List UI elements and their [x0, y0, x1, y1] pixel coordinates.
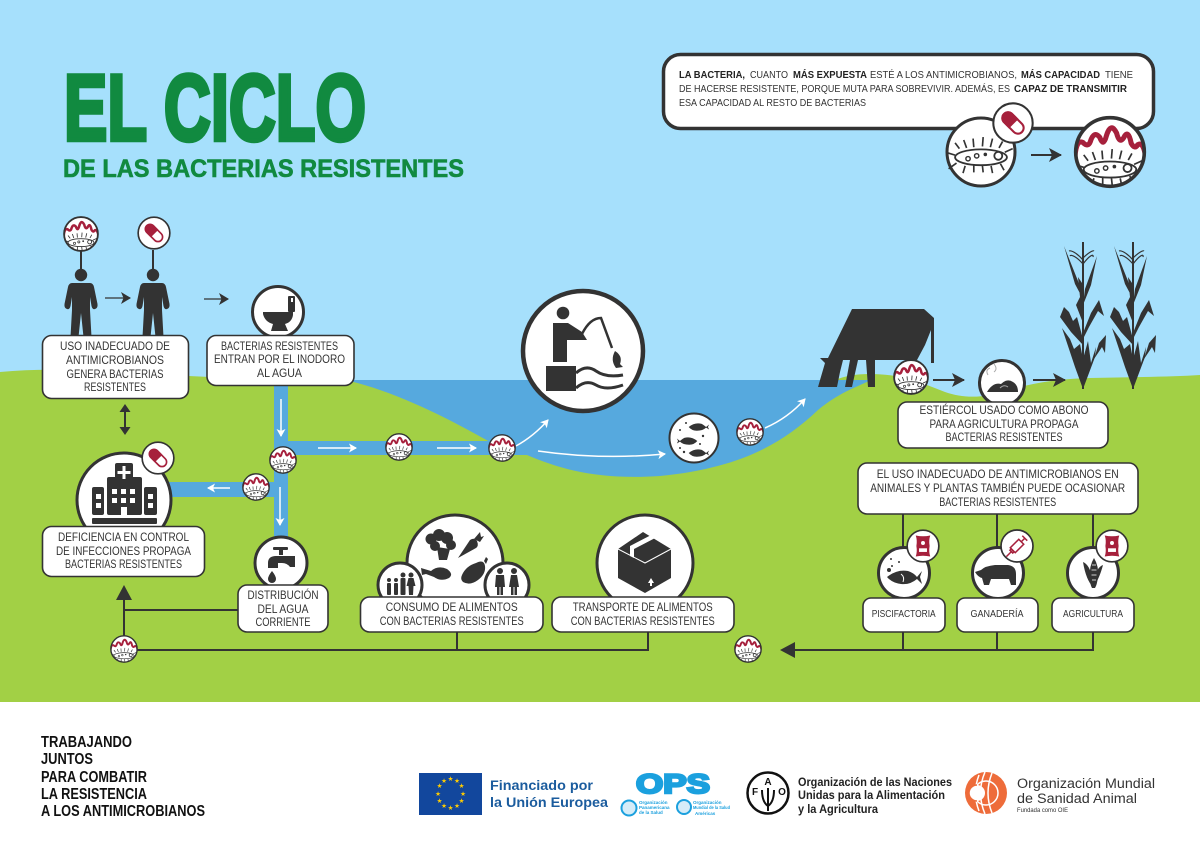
logo: FAO: Organización de las Naciones — [798, 775, 952, 789]
text box: explanation: MÁS CAPACIDAD — [1021, 68, 1100, 81]
logo: OPS: Mundial de la Salud — [693, 805, 730, 810]
icon: corn plant — [1060, 242, 1106, 389]
slogan: PARA COMBATIR — [41, 769, 147, 786]
logo: OPS: OPS — [636, 769, 710, 799]
text box: explanation: ESA CAPACIDAD AL RESTO DE BACTERIAS — [679, 97, 866, 109]
icon: syringe — [1001, 530, 1033, 562]
footer background — [0, 702, 1200, 849]
logo: European Union: ★ — [441, 777, 447, 785]
text box: explanation: LA BACTERIA, — [679, 69, 745, 81]
icon: capsule — [993, 103, 1033, 143]
logo: European Union: ★ — [459, 782, 465, 790]
icon: feed sack — [907, 530, 939, 562]
slogan: TRABAJANDO — [41, 734, 132, 751]
text box: water distribution: CORRIENTE — [256, 615, 310, 629]
icon: faucet — [255, 537, 307, 589]
text box: water distribution: DEL AGUA — [258, 602, 308, 616]
text box: water distribution — [238, 585, 328, 632]
label: fish farm: PISCIFACTORIA — [872, 609, 936, 620]
icon: resistant bacteria — [1075, 118, 1145, 186]
text box: inappropriate use: RESISTENTES — [84, 380, 146, 394]
icon: pig — [972, 548, 1024, 598]
logo: WOAH: Fundada como OIE — [1017, 807, 1069, 814]
text box: hospital: DE INFECCIONES PROPAGA — [56, 544, 191, 558]
slogan: LA RESISTENCIA — [41, 786, 147, 803]
text box: toilet: AL AGUA — [257, 366, 302, 380]
arrow: bacteria to resistant — [1031, 154, 1061, 156]
arrow: double headed — [120, 404, 130, 435]
text box: transport: CON BACTERIAS RESISTENTES — [571, 614, 715, 628]
text box: transport — [552, 597, 734, 632]
label: livestock — [957, 598, 1038, 632]
step: person with resistant bacteria — [64, 217, 98, 337]
icon: manure — [980, 360, 1024, 406]
label: livestock: GANADERÍA — [970, 607, 1024, 620]
arrow: to manure — [933, 379, 964, 381]
text box: consumption: CONSUMO DE ALIMENTOS — [386, 600, 518, 614]
text box: water distribution: DISTRIBUCIÓN — [248, 587, 318, 602]
text box: explanation: MÁS EXPUESTA — [793, 68, 867, 81]
bacteria markers along the flow — [111, 360, 928, 662]
text box: manure — [898, 402, 1108, 448]
text box: explanation — [664, 54, 1154, 128]
logo: European Union: ★ — [460, 790, 466, 798]
arrow: person to toilet — [204, 298, 228, 300]
slogan — [41, 734, 205, 820]
text box: explanation: ESTÉ A LOS ANTIMICROBIANOS, — [870, 68, 1017, 81]
logo: OPS: de la Salud — [639, 810, 663, 815]
arrow: manure to crops — [1033, 379, 1065, 381]
logo: FAO: A — [764, 777, 772, 788]
logo: European Union: ★ — [454, 802, 460, 810]
text box: explanation: DE HACERSE RESISTENTE, PORQUE MUTA PARA SOBREVIVIR. ADEMÁS, ES — [679, 82, 1010, 95]
logo: European Union: Financiado por — [490, 778, 594, 793]
slogan: JUNTOS — [41, 751, 93, 768]
logo: OPS — [622, 769, 730, 816]
logo: European Union: la Unión Europea — [490, 795, 609, 810]
label: fish farm — [863, 598, 945, 632]
text box: manure: PARA AGRICULTURA PROPAGA — [930, 417, 1078, 431]
text box: animals and plants: BACTERIAS RESISTENTES — [939, 495, 1056, 509]
text box: hospital: DEFICIENCIA EN CONTROL — [58, 530, 189, 544]
panel: bacteria explanation — [664, 54, 1154, 186]
logo: WOAH — [965, 772, 1155, 814]
icon: fishing — [523, 291, 643, 411]
text box: explanation: CAPAZ DE TRANSMITIR — [1014, 83, 1127, 95]
text box: toilet — [207, 336, 354, 386]
text box: transport: TRANSPORTE DE ALIMENTOS — [573, 600, 713, 614]
logo: WOAH: Organización Mundial — [1017, 776, 1155, 791]
text box: manure: BACTERIAS RESISTENTES — [946, 430, 1062, 444]
white water flow arrows — [208, 399, 805, 525]
text box: inappropriate use: GENERA BACTERIAS — [66, 367, 164, 381]
logo: OPS: Panamericana — [639, 805, 670, 810]
logo: FAO — [748, 772, 952, 816]
label: agriculture — [1052, 598, 1134, 632]
text box: consumption — [360, 597, 543, 632]
icon: food — [407, 515, 503, 611]
icon: fish farm — [878, 548, 930, 598]
icon: corn plant — [1110, 242, 1156, 389]
pipes: water channels — [165, 385, 500, 545]
flow lines bottom — [116, 514, 1093, 658]
logo: OPS: Américas — [695, 811, 716, 816]
icon: capsule hospital — [142, 442, 174, 474]
logo: WOAH: de Sanidad Animal — [1017, 791, 1137, 806]
logo: European Union — [419, 773, 609, 815]
title: DE LAS BACTERIAS RESISTENTES — [63, 155, 464, 183]
icon: cow — [818, 309, 934, 387]
logo: FAO: F — [752, 787, 758, 798]
text box: inappropriate use: ANTIMICROBIANOS — [66, 353, 164, 367]
icon: family — [378, 563, 422, 607]
icon: fish in water — [670, 414, 718, 462]
icon: bacteria before exposure — [947, 118, 1015, 186]
icon: hospital — [77, 453, 171, 547]
label: agriculture: AGRICULTURA — [1063, 609, 1123, 620]
text box: toilet: BACTERIAS RESISTENTES — [221, 339, 338, 353]
logo: European Union: ★ — [448, 775, 454, 783]
text box: animals and plants — [858, 463, 1138, 514]
logo: European Union: ★ — [435, 790, 441, 798]
logo: European Union: ★ — [437, 797, 443, 805]
text box: animals and plants: ANIMALES Y PLANTAS TAMBIÉN PUEDE OCASIONAR — [870, 480, 1125, 495]
logo: FAO: Unidas para la Alimentación — [798, 788, 945, 802]
logo: FAO: O — [778, 787, 786, 798]
slogan: A LOS ANTIMICROBIANOS — [41, 803, 205, 820]
text box: animals and plants: EL USO INADECUADO DE ANTIMICROBIANOS EN — [877, 467, 1119, 481]
arrow: between people — [105, 297, 130, 299]
icon: adults — [485, 563, 529, 607]
logo: European Union: ★ — [448, 804, 454, 812]
text box: explanation: TIENE — [1105, 69, 1133, 81]
step: person with antimicrobial — [136, 217, 170, 337]
text box: hospital: BACTERIAS RESISTENTES — [65, 557, 182, 571]
text box: inappropriate use — [42, 336, 188, 398]
text box: hospital — [42, 526, 204, 576]
text box: toilet: ENTRAN POR EL INODORO — [214, 352, 345, 366]
text box: consumption: CON BACTERIAS RESISTENTES — [380, 614, 524, 628]
green ground — [0, 370, 1200, 702]
logo: European Union: ★ — [459, 797, 465, 805]
logo: European Union: ★ — [437, 782, 443, 790]
title: EL CICLO — [64, 55, 366, 160]
icon: corn cob — [1068, 548, 1118, 598]
logo: European Union: ★ — [454, 777, 460, 785]
text box: explanation: CUANTO — [750, 69, 788, 81]
text box: inappropriate use: USO INADECUADO DE — [60, 339, 170, 353]
logo: FAO: y la Agricultura — [798, 802, 878, 816]
logo: European Union: ★ — [441, 802, 447, 810]
icon: toilet — [252, 286, 304, 338]
logo: OPS: Organización — [639, 800, 668, 805]
water: river — [345, 380, 871, 477]
icon: seed sack — [1096, 530, 1128, 562]
logo: OPS: Organización — [693, 800, 722, 805]
icon: package — [597, 515, 693, 611]
text box: manure: ESTIÉRCOL USADO COMO ABONO — [920, 402, 1088, 417]
